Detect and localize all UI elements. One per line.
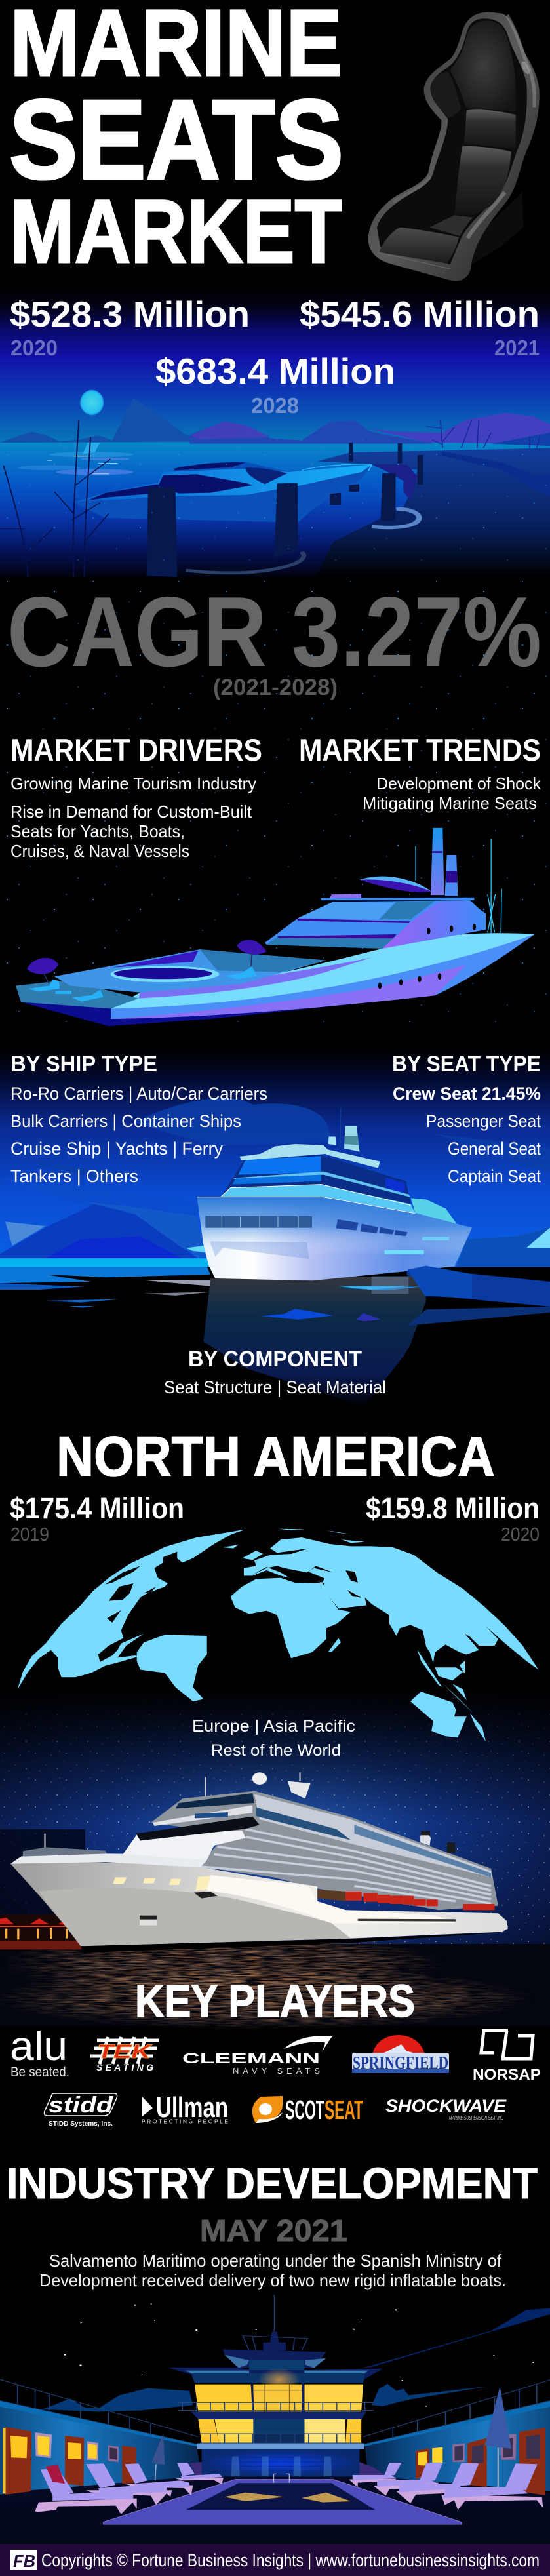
mountains xyxy=(0,398,550,446)
clouds xyxy=(0,1098,550,1225)
forward superstructure xyxy=(123,1831,246,1867)
title xyxy=(9,0,344,282)
north america value 2020: 2020 xyxy=(501,1524,540,1545)
logo: Scotseat: SCOT xyxy=(285,2095,324,2125)
starfield xyxy=(0,577,550,1023)
masts xyxy=(416,839,501,933)
footer xyxy=(0,2544,550,2576)
logo: Stidd: stidd xyxy=(49,2093,113,2118)
logo: Cleemann navy seats: CLEEMANN xyxy=(182,2050,320,2067)
other regions: Rest of the World xyxy=(211,1741,341,1760)
icon: Fortune Business Insights logo: FB xyxy=(13,2551,35,2571)
panel: market drivers: Growing Marine Tourism Industry xyxy=(10,774,256,793)
regional heading: NORTH AMERICA xyxy=(56,1425,495,1488)
market value 2020: 2020 xyxy=(10,336,58,360)
panel: by component: BY COMPONENT xyxy=(188,1347,362,1372)
mountains xyxy=(0,1204,207,1267)
mooring posts xyxy=(147,443,423,577)
panel: by seat type: Captain Seat xyxy=(448,1166,541,1186)
water ripples xyxy=(0,1267,550,1308)
illustration: ship pool deck at night xyxy=(0,2295,550,2544)
deck stairs xyxy=(189,2462,386,2476)
lit openings xyxy=(113,1876,210,1890)
panel: by ship type: Tankers | Others xyxy=(10,1166,138,1186)
antenna and funnels xyxy=(252,1772,267,1785)
logo: Ullman xyxy=(142,2091,228,2124)
eurasia xyxy=(244,1537,538,1670)
harbour pier xyxy=(0,1914,81,1949)
logo: TEK seating: SEATING xyxy=(96,2062,153,2072)
panel: by component: Seat Structure | Seat Material xyxy=(164,1377,386,1397)
other regions: Europe | Asia Pacific xyxy=(192,1717,355,1735)
panel: by component xyxy=(164,1347,386,1397)
panel: ship scene background xyxy=(0,1049,550,1408)
logo: Ullman: Ullman xyxy=(156,2091,228,2124)
panel: by ship type: Cruise Ship | Yachts | Ferry xyxy=(10,1139,223,1159)
logo: Shockwave: SHOCKWAVE xyxy=(385,2096,507,2116)
market value 2020: $528.3 Million xyxy=(10,294,250,334)
panel: by seat type: General Seat xyxy=(448,1139,541,1159)
panel: by seat type: Passenger Seat xyxy=(426,1111,541,1131)
icon: black marine seat xyxy=(368,12,540,281)
umbrellas xyxy=(151,2387,511,2487)
logo: Shockwave: MARINE SUSPENSION SEATING xyxy=(449,2115,503,2121)
panel: market drivers: Cruises, & Naval Vessels xyxy=(10,841,189,861)
logo: Scotseat xyxy=(252,2095,363,2125)
key players heading: KEY PLAYERS xyxy=(135,1975,415,2027)
british isles and iceland xyxy=(223,1529,365,1560)
decks xyxy=(151,1791,498,1910)
panel: lake scene with boat xyxy=(0,390,550,590)
development description: Development received delivery of two new rigid inflatable boats. xyxy=(39,2270,506,2290)
logo: Stidd: STIDD Systems, Inc. xyxy=(49,2120,113,2128)
deck floor xyxy=(0,2476,550,2544)
pool xyxy=(104,2480,462,2524)
panel: by ship type: Ro-Ro Carriers | Auto/Car Carriers xyxy=(10,1084,267,1103)
panel: by ship type xyxy=(10,1052,267,1186)
panel: by seat type: Crew Seat 21.45% xyxy=(393,1084,541,1103)
panel: market trends: Development of Shock xyxy=(376,774,541,793)
logo: TEK seating xyxy=(90,2037,159,2072)
panel: by seat type: BY SEAT TYPE xyxy=(392,1052,541,1077)
market value 2021 xyxy=(300,294,540,360)
logo: Scotseat: SEAT xyxy=(324,2095,363,2125)
umbrellas xyxy=(359,877,431,892)
title: MARKET xyxy=(10,182,342,282)
panel: market drivers: MARKET DRIVERS xyxy=(10,732,262,767)
ship reflection xyxy=(203,1276,426,1408)
north america xyxy=(10,1530,246,1719)
market value 2020 xyxy=(10,294,250,360)
south america xyxy=(137,1635,207,1701)
development description xyxy=(39,2251,506,2290)
panel: market drivers: Rise in Demand for Custom-Built xyxy=(10,802,252,822)
bridge tower xyxy=(168,2295,383,2476)
north america value 2019: $175.4 Million xyxy=(10,1492,184,1525)
north america value 2019 xyxy=(10,1492,184,1545)
logo: Springfield xyxy=(352,2035,449,2073)
title: SEATS xyxy=(9,77,344,203)
southeast asia and australia xyxy=(410,1647,486,1742)
lifeboats xyxy=(345,1892,494,1910)
illustration: luxury yacht xyxy=(16,828,535,1026)
logo: TEK seating: TEK xyxy=(97,2041,153,2063)
globe map xyxy=(10,1529,538,1742)
mediterranean, black and caspian seas xyxy=(251,1566,361,1598)
logo: Cleemann navy seats xyxy=(182,2036,332,2076)
panel: market trends: Mitigating Marine Seats xyxy=(363,793,537,813)
sun loungers xyxy=(35,2463,543,2514)
market value 2028: 2028 xyxy=(251,393,299,418)
loungers xyxy=(28,966,257,1002)
panel: by ship type: BY SHIP TYPE xyxy=(10,1052,157,1077)
lake stars xyxy=(0,433,550,564)
moon glint on water xyxy=(18,443,133,475)
market value 2028: $683.4 Million xyxy=(155,351,395,391)
starry sky xyxy=(0,1688,550,1957)
boat xyxy=(72,461,372,523)
africa xyxy=(231,1578,351,1658)
illustration: cruise liner xyxy=(0,1772,508,1952)
hills xyxy=(363,2308,550,2368)
development date: MAY 2021 xyxy=(200,2213,347,2248)
panel: by ship type: Bulk Carriers | Container Ships xyxy=(10,1111,241,1131)
funnels xyxy=(431,828,444,895)
logo: Norsap xyxy=(473,2031,541,2084)
portholes xyxy=(378,924,476,989)
logo: Norsap: NORSAP xyxy=(473,2066,541,2084)
pier xyxy=(316,448,550,577)
market value 2021: $545.6 Million xyxy=(300,294,540,334)
shadow line under hull xyxy=(81,1932,501,1952)
logo: alu: alu xyxy=(10,2024,68,2069)
market value 2028 xyxy=(155,351,395,418)
logo: Stidd xyxy=(45,2093,117,2128)
logo: Springfield: SPRINGFIELD xyxy=(353,2053,448,2072)
north america value 2020 xyxy=(366,1492,540,1545)
shoreline xyxy=(0,1258,210,1267)
side walls xyxy=(0,2406,202,2496)
hull xyxy=(10,1862,508,1946)
panel: market drivers xyxy=(10,732,262,861)
other regions xyxy=(192,1717,355,1760)
illustration: cruise ship xyxy=(197,1108,472,1298)
towel xyxy=(46,2465,65,2484)
icon: moon xyxy=(80,390,104,415)
water under cruise liner xyxy=(0,1928,550,2030)
logo: Cleemann navy seats: NAVY SEATS xyxy=(233,2066,320,2076)
development description: Salvamento Maritimo operating under the Spanish Ministry of xyxy=(49,2251,502,2270)
cabin doors and windows xyxy=(3,2427,545,2495)
logo: alu: Be seated. xyxy=(10,2065,69,2080)
logo: Ullman: PROTECTING PEOPLE xyxy=(142,2118,228,2124)
rope xyxy=(372,509,419,528)
reeds xyxy=(0,420,111,577)
stars xyxy=(64,2303,534,2407)
hudson bay and arctic gaps xyxy=(106,1566,156,1623)
sky gradient xyxy=(0,288,550,443)
market value 2021: 2021 xyxy=(494,336,540,360)
CAGR figure: (2021-2028) xyxy=(213,675,338,700)
north america value 2019: 2019 xyxy=(10,1524,49,1545)
yacht superstructure xyxy=(265,900,486,949)
panel: market trends xyxy=(299,732,541,813)
panel: by seat type xyxy=(392,1052,541,1186)
panel: market drivers: Seats for Yachts, Boats, xyxy=(10,822,185,841)
